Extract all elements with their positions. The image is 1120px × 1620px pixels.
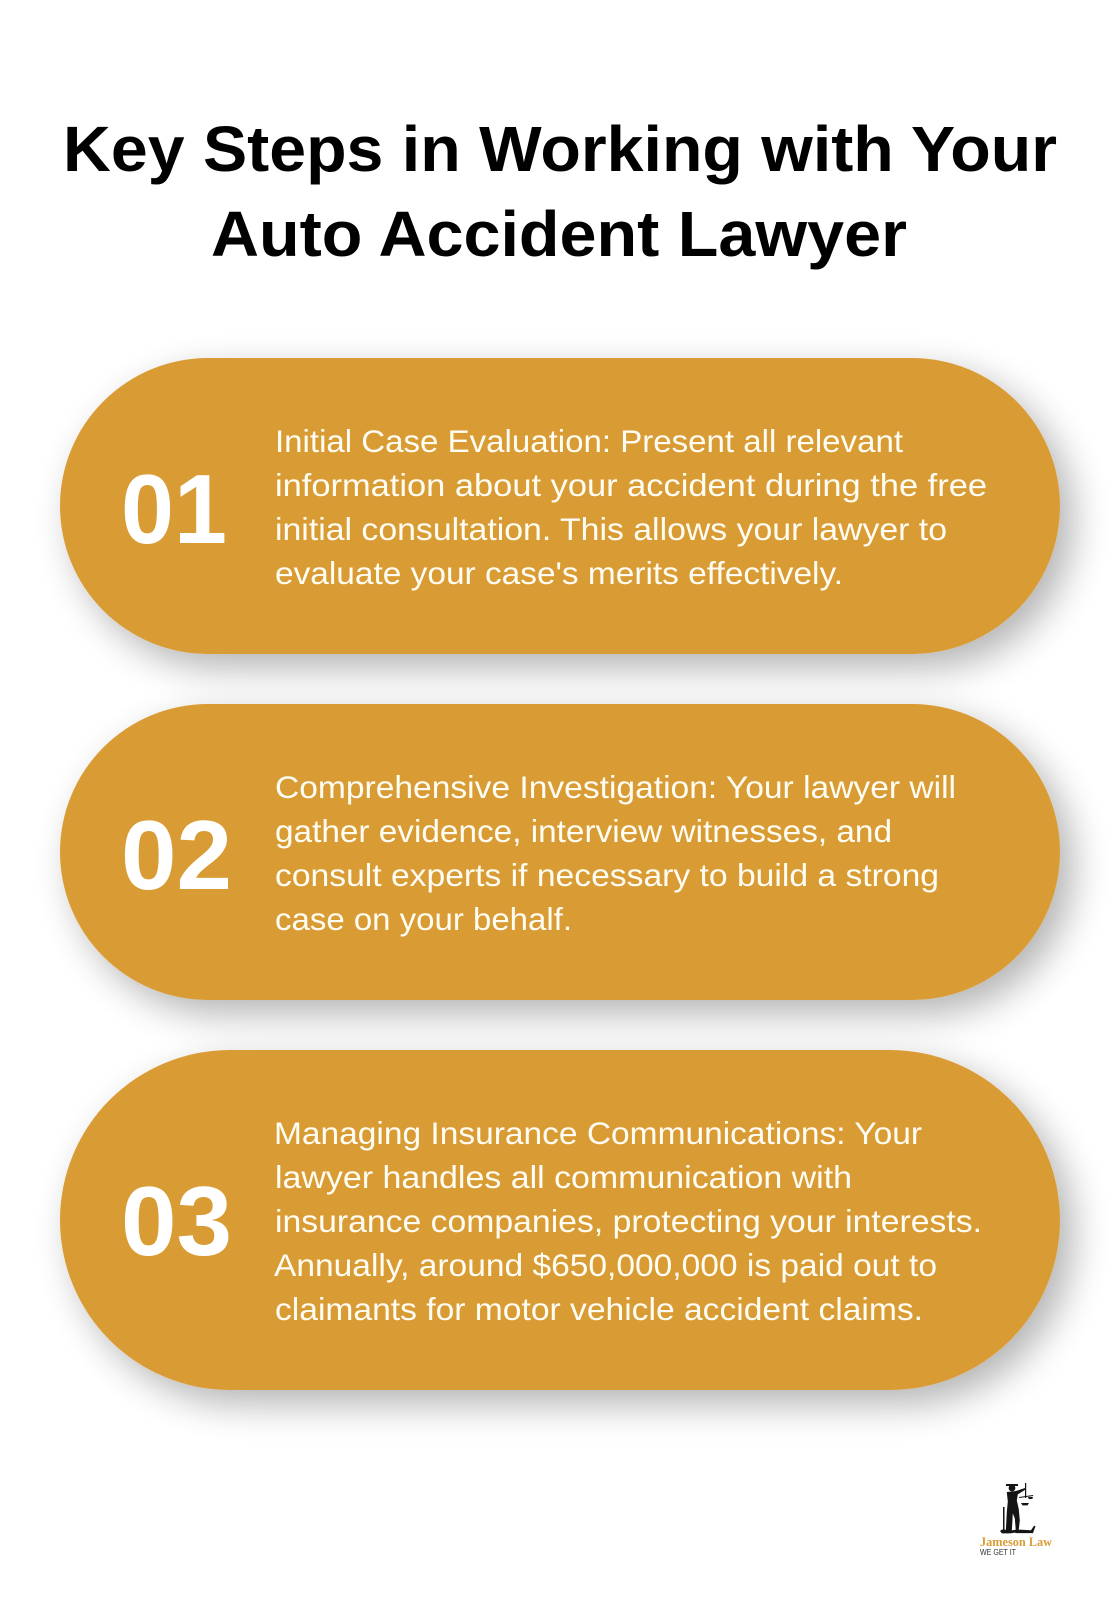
text block: managing insurance communications: Annually, around $650,000,000 is paid out to [274, 1247, 937, 1283]
pill background 2 [60, 704, 1060, 1000]
text block: comprehensive investigation [275, 769, 956, 937]
text block: initial case evaluation: evaluate your case's merits effectively. [275, 555, 843, 591]
logo: Jameson Law [980, 1483, 1052, 1557]
icon: lady justice [1000, 1483, 1036, 1533]
text block: comprehensive investigation: case on your behalf. [275, 901, 572, 937]
title [63, 113, 1057, 270]
text block: comprehensive investigation: gather evidence, interview witnesses, and [275, 813, 892, 849]
text block: initial case evaluation: Initial Case Evaluation: Present all relevant [275, 423, 903, 459]
text block: managing insurance communications: lawyer handles all communication with [275, 1159, 852, 1195]
title: Key Steps in Working with Your [63, 113, 1057, 185]
panel: step 1 [60, 358, 1060, 654]
text block: managing insurance communications [274, 1115, 982, 1327]
step number 03: 03 [121, 1166, 232, 1276]
pill background 3 [60, 1050, 1060, 1390]
pill background 1 [60, 358, 1060, 654]
text block: managing insurance communications: Managing Insurance Communications: Your [274, 1115, 922, 1151]
title: Auto Accident Lawyer [211, 198, 907, 270]
text block: initial case evaluation: information about your accident during the free [275, 467, 987, 503]
text block: managing insurance communications: insurance companies, protecting your interests. [275, 1203, 982, 1239]
panel: step 2 [60, 704, 1060, 1000]
text block: initial case evaluation: initial consultation. This allows your lawyer to [275, 511, 947, 547]
step number 02: 02 [121, 800, 232, 910]
logo name: Jameson Law [980, 1535, 1052, 1549]
text block: managing insurance communications: claimants for motor vehicle accident claims. [275, 1291, 923, 1327]
logo tagline: WE GET IT [980, 1547, 1016, 1557]
step number 01: 01 [121, 454, 227, 564]
panel: step 3 [60, 1050, 1060, 1390]
text block: comprehensive investigation: Comprehensive Investigation: Your lawyer will [275, 769, 956, 805]
text block: initial case evaluation [275, 423, 987, 591]
text block: comprehensive investigation: consult experts if necessary to build a strong [275, 857, 939, 893]
